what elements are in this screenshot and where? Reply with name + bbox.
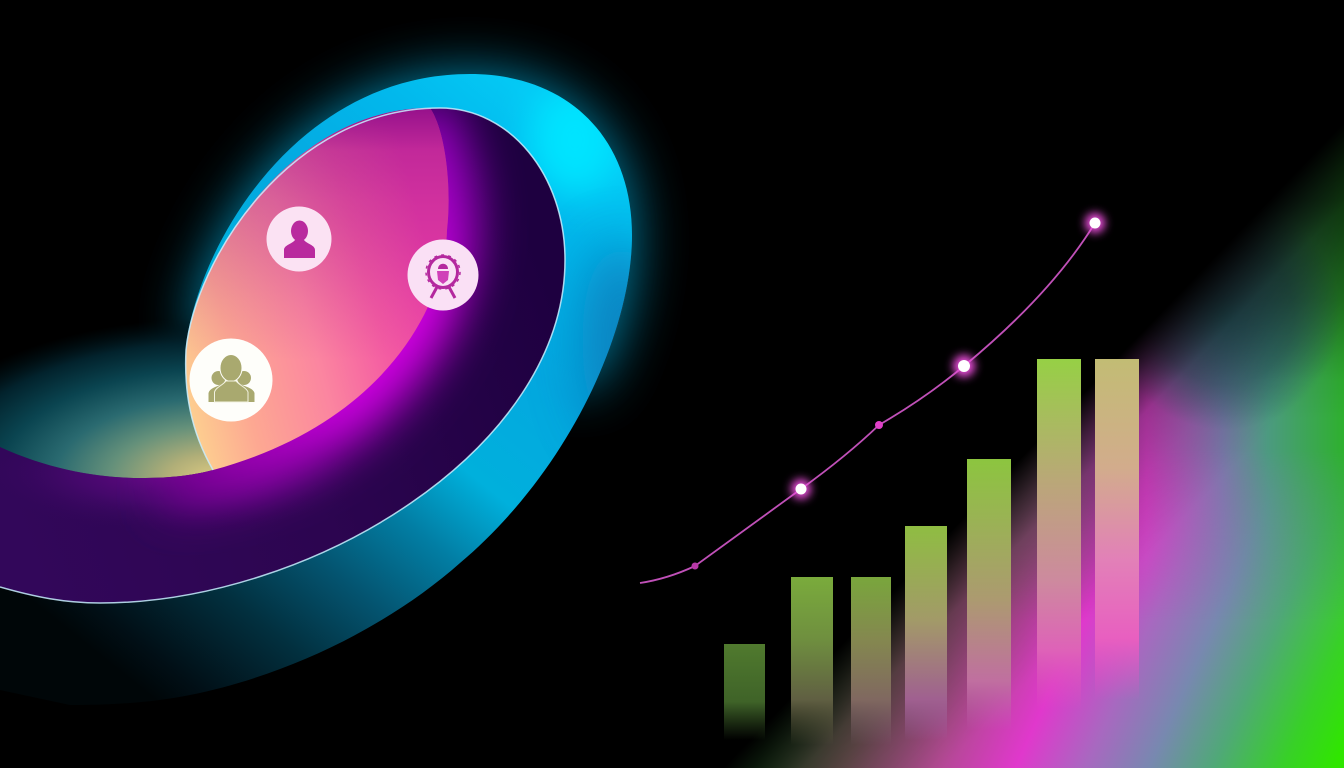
glow: cyan halo around ring [190, 74, 632, 390]
ring: pink lobe [186, 108, 449, 470]
bar chart [724, 359, 1139, 745]
purple band: soft glow under the lobe foot [40, 464, 278, 514]
point 4 [953, 355, 975, 377]
bar 3 [851, 577, 891, 745]
purple band: bright magenta glow along lobe edge [160, 90, 479, 511]
glow: right-hand colour wash [735, 135, 1344, 768]
icon: single person [266, 206, 332, 272]
bar 7 [1095, 359, 1139, 700]
bar 5 [967, 459, 1011, 730]
cyan band: bright highlight [530, 85, 620, 195]
ring: white edge line [0, 108, 565, 603]
icon: rosette badge [408, 240, 478, 310]
point 5 [1085, 213, 1105, 233]
trend line [640, 213, 1105, 583]
cyan band: deep blue shade [582, 240, 662, 440]
bar 4 [905, 526, 947, 740]
bar 1 [724, 644, 765, 740]
glow: teal to yellow under the lobe [0, 250, 230, 490]
ring: inner purple band [0, 90, 565, 603]
point 1 [692, 562, 698, 570]
ring: outer cyan band [0, 74, 662, 705]
point 2 [791, 479, 811, 499]
bar 2 [791, 577, 833, 745]
point 3 [875, 421, 883, 429]
bar 6 [1037, 359, 1081, 710]
icon: group of people [190, 338, 272, 422]
